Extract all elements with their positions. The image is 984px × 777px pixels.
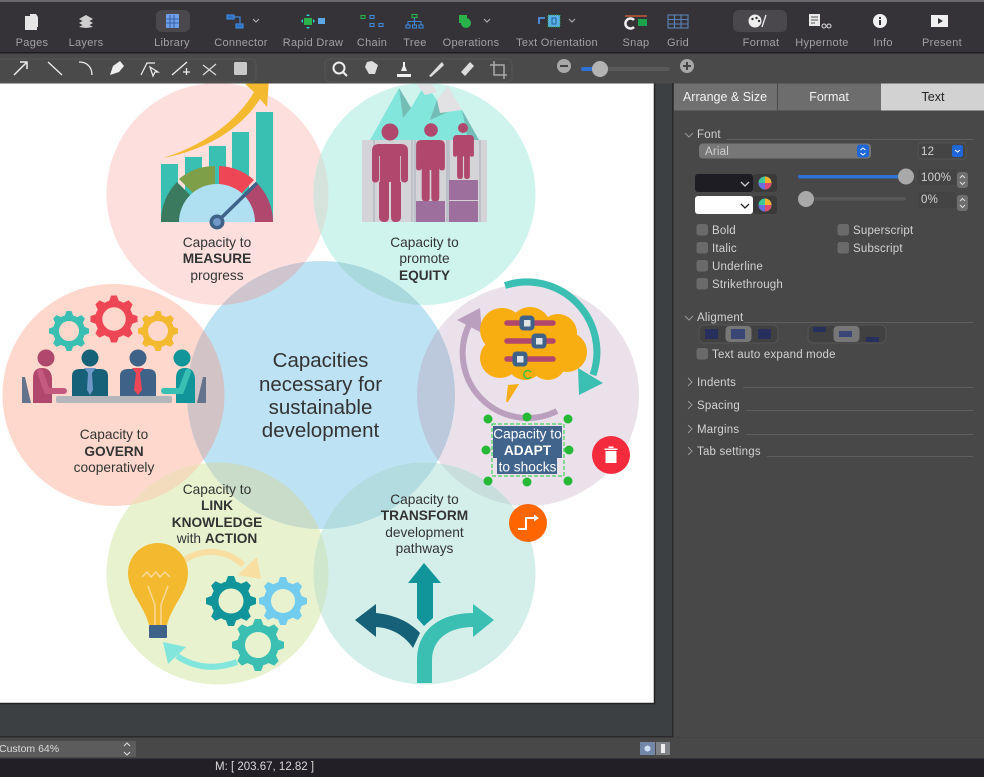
label: govern: GOVERN — [84, 444, 144, 459]
section: font: 0% — [921, 194, 938, 206]
selected text: adapt — [482, 412, 574, 486]
top toolbar: Present — [922, 37, 962, 49]
label: link knowledge: KNOWLEDGE — [172, 515, 262, 530]
label: equity: EQUITY — [399, 268, 450, 283]
top toolbar: Pages — [16, 37, 49, 49]
tabs: Format — [809, 90, 849, 104]
section: font: Superscript — [853, 225, 914, 237]
top toolbar: Info — [873, 37, 893, 49]
collapsed sections: Indents — [697, 377, 736, 389]
top toolbar: Layers — [69, 37, 104, 49]
icon: light bulb and gears — [128, 543, 307, 671]
section: alignment: Aligment — [697, 312, 744, 324]
label: transform: TRANSFORM — [381, 508, 468, 523]
icon: governance gears and meeting — [22, 296, 206, 403]
icon: present — [931, 15, 948, 27]
section: font: Arial — [705, 146, 729, 158]
icon: grid — [668, 15, 688, 28]
label: govern: cooperatively — [74, 460, 154, 475]
zoom slider — [557, 59, 694, 77]
icon: adapt brain with sliders — [457, 282, 603, 418]
label: transform: Capacity to — [390, 492, 459, 507]
icon: snap — [625, 16, 647, 28]
connector button — [509, 504, 547, 542]
icon: hypernote — [809, 14, 831, 28]
icon: format palette — [748, 14, 766, 28]
icon: text orientation — [539, 15, 560, 27]
top toolbar: Connector — [214, 37, 268, 49]
top toolbar: Operations — [443, 37, 500, 49]
icon: tree — [406, 14, 423, 28]
section: alignment — [685, 312, 973, 361]
top toolbar: Library — [154, 37, 190, 49]
collapsed sections: Spacing — [697, 400, 740, 412]
top toolbar: Chain — [357, 37, 387, 49]
icon: info — [873, 14, 887, 28]
tabs — [674, 84, 984, 110]
section: alignment: Text auto expand mode — [712, 349, 836, 361]
icon: operations — [459, 15, 471, 28]
top toolbar: Snap — [623, 37, 649, 49]
section: font — [685, 129, 973, 291]
label: govern: Capacity to — [80, 427, 148, 442]
center label: development — [262, 419, 379, 442]
label: link knowledge: Capacity to — [183, 482, 251, 497]
label: measure: Capacity to — [183, 235, 251, 250]
center label — [259, 349, 382, 442]
icon: rapid draw — [301, 14, 325, 29]
center label: sustainable — [269, 396, 372, 419]
section: font: Underline — [712, 261, 763, 273]
bottom status bar — [0, 758, 984, 777]
icon: measure chart and gauge — [161, 80, 273, 230]
center label: Capacities — [273, 349, 368, 372]
label: link knowledge: with ACTION — [177, 531, 257, 546]
section: font: Bold — [712, 225, 736, 237]
icon: transform arrows — [355, 563, 494, 683]
top toolbar: Grid — [667, 37, 689, 49]
delete button — [592, 436, 630, 474]
label: transform: pathways — [396, 541, 454, 556]
white page — [0, 80, 654, 704]
chevron — [253, 19, 259, 22]
selected text: adapt: to shocks — [499, 460, 557, 474]
section: font: Subscript — [853, 243, 903, 255]
top toolbar: Hypernote — [795, 37, 849, 49]
top toolbar: Format — [743, 37, 779, 49]
icon: chain — [361, 16, 383, 26]
collapsed sections: Tab settings — [697, 446, 761, 458]
label: link knowledge: LINK — [201, 498, 233, 513]
selected text: adapt: Capacity to — [493, 426, 562, 442]
icon: library — [166, 14, 179, 28]
selected text: adapt: ADAPT — [504, 443, 552, 458]
top toolbar — [0, 0, 984, 54]
tabs: Text — [922, 90, 945, 104]
zoom status strip — [0, 736, 984, 758]
section: font: Italic — [712, 243, 737, 255]
drawing toolbar — [0, 54, 984, 84]
section: font: 12 — [921, 146, 934, 158]
collapsed sections: Margins — [697, 424, 739, 436]
icon: connector — [227, 15, 243, 28]
section: font: Strikethrough — [712, 279, 783, 291]
zoom status strip: Custom 64% — [0, 743, 59, 755]
collapsed sections — [688, 377, 973, 458]
center label: necessary for — [259, 373, 382, 396]
top toolbar: Text Orientation — [516, 37, 598, 49]
section: font: Font — [697, 129, 721, 141]
icon: pages — [25, 14, 38, 30]
canvas background — [0, 84, 673, 738]
label: equity: Capacity to — [390, 235, 459, 250]
bottom status bar: M: [ 203.67, 12.82 ] — [215, 761, 314, 773]
venn diagram circles — [2, 83, 639, 684]
section: font: 100% — [921, 172, 951, 184]
icon: layers — [79, 15, 93, 28]
label: measure: MEASURE — [183, 251, 251, 266]
tabs: Arrange & Size — [683, 90, 767, 104]
icon: equity people and mountains — [362, 84, 487, 222]
label: measure: progress — [190, 268, 244, 283]
label: equity: promote — [399, 251, 450, 266]
top toolbar: Tree — [403, 37, 427, 49]
label: transform: development — [385, 525, 464, 540]
right inspector panel — [672, 83, 984, 737]
top toolbar: Rapid Draw — [283, 37, 343, 49]
